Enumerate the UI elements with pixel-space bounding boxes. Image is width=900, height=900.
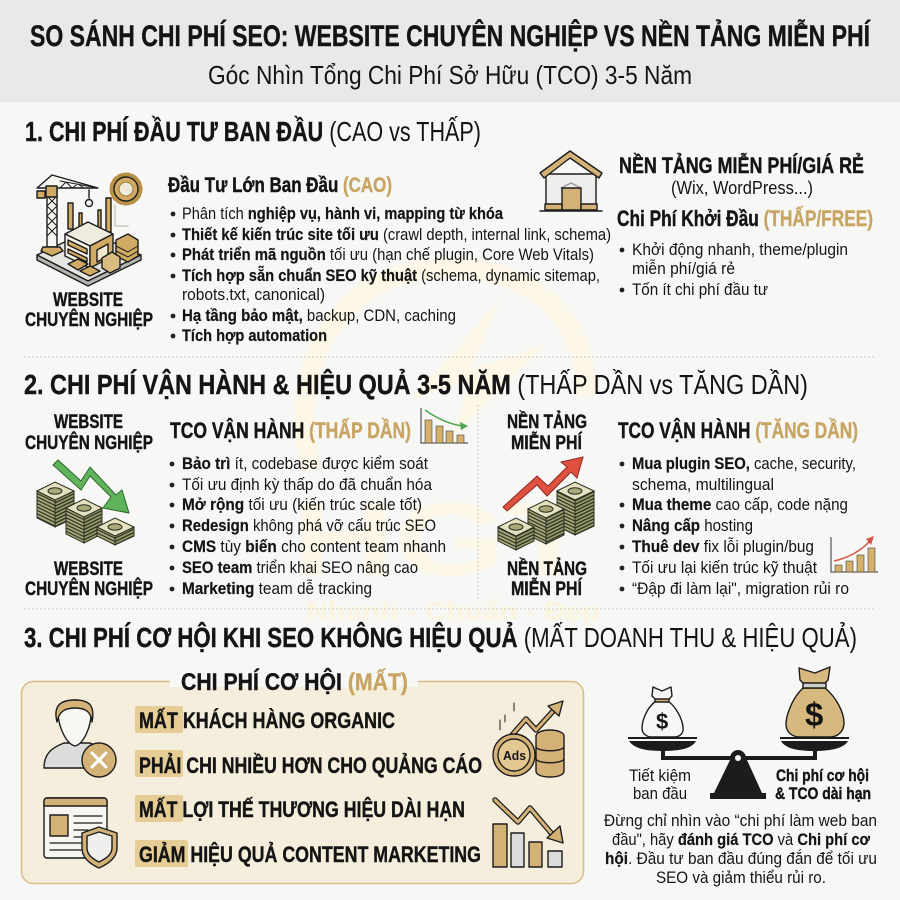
panel: platform running cost: [618, 418, 858, 598]
bullet list: robots.txt, canonical): [182, 285, 325, 304]
row: reduced content marketing: GIẢM HIỆU QUẢ CONTENT MARKETING: [139, 842, 481, 867]
bullet list: [171, 204, 611, 345]
label: nền tảng miễn phí top: [507, 410, 587, 454]
bullet list: Marketing team dễ tracking: [182, 579, 372, 598]
platform examples: (Wix, WordPress...): [671, 178, 813, 198]
heading: Đầu Tư Lớn Ban Đầu (CAO): [168, 174, 392, 197]
label: website chuyên nghiệp: WEBSITE: [53, 289, 123, 311]
label: nền tảng miễn phí top: MIỄN PHÍ: [511, 431, 582, 454]
label: opportunity cost long term: [775, 766, 871, 803]
watermark logo: Nhanh - Chuẩn - Đẹp: [306, 596, 600, 626]
chart: increasing bars: [831, 536, 878, 572]
money bag small: [642, 687, 683, 737]
bullet list: [170, 454, 446, 598]
label: nền tảng miễn phí bottom: NỀN TẢNG: [507, 557, 587, 580]
label: nền tảng miễn phí bottom: [507, 557, 587, 600]
label: website chuyên nghiệp top: [25, 411, 153, 454]
money stack middle: [528, 500, 564, 544]
arrow down: [53, 460, 129, 513]
bullet list: Phân tích nghiệp vụ, hành vi, mapping từ khóa: [182, 204, 503, 223]
bullet list: Redesign không phá vỡ cấu trúc SEO: [182, 516, 436, 535]
bullet list: Mở rộng tối ưu (kiến trúc scale tốt): [182, 495, 422, 514]
conclusion text: đầu", hãy đánh giá TCO và Chi phí cơ: [612, 830, 871, 849]
panel: initial investment professional website: [168, 174, 611, 345]
bullet list: Tối ưu lại kiến trúc kỹ thuật: [632, 558, 817, 577]
bullet list: Mua plugin SEO, cache, security,: [632, 454, 856, 473]
bullet list: [620, 240, 848, 299]
label: website chuyên nghiệp: CHUYÊN NGHIỆP: [25, 307, 153, 331]
label: website chuyên nghiệp top: WEBSITE: [54, 411, 123, 433]
label: nền tảng miễn phí top: NỀN TẢNG: [507, 410, 587, 433]
icon: green falling arrow over money stacks: [37, 460, 134, 545]
bullet list: Tốn ít chi phí đầu tư: [632, 280, 768, 299]
watermark logo: [292, 268, 600, 626]
bullet list: Tối ưu định kỳ thấp do đã chuẩn hóa: [182, 475, 432, 494]
money stack middle: [66, 499, 102, 543]
pivot: [730, 750, 746, 766]
label: initial savings: Tiết kiệm: [629, 766, 691, 785]
money stack short: [498, 518, 534, 550]
watermark logo: HGT: [292, 482, 592, 598]
icon: falling bars: [493, 800, 563, 867]
money stack tall: [557, 482, 594, 535]
bullet list: Mua theme cao cấp, code nặng: [632, 495, 848, 514]
money stack tall: [37, 482, 74, 527]
bullet list: Tích hợp sẵn chuẩn SEO kỹ thuật (schema, dynamic sitemap,: [182, 265, 600, 285]
section 2 heading: 2. CHI PHÍ VẬN HÀNH & HIỆU QUẢ 3-5 NĂM (THẤP DẦN vs TĂNG DẦN): [24, 368, 808, 400]
bullet list: Phát triển mã nguồn tối ưu (hạn chế plugin, Core Web Vitals): [182, 245, 594, 264]
conclusion text: Đừng chỉ nhìn vào “chi phí làm web ban: [604, 811, 877, 830]
heading: TCO VẬN HÀNH (TĂNG DẦN): [618, 418, 858, 443]
label: website chuyên nghiệp top: CHUYÊN NGHIỆP: [25, 430, 153, 454]
money bag large: [786, 667, 844, 737]
label: website chuyên nghiệp bottom: CHUYÊN NGHIỆP: [25, 576, 153, 600]
bullet list: Thiết kế kiến trúc site tối ưu (crawl depth, internal link, schema): [182, 225, 611, 244]
icon: simple house: [540, 151, 602, 211]
bullet list: schema, multilingual: [632, 475, 774, 494]
label: website chuyên nghiệp bottom: [25, 558, 153, 600]
label: initial savings: ban đầu: [633, 784, 687, 803]
bullet list: Bảo trì ít, codebase được kiểm soát: [182, 454, 428, 473]
label: website chuyên nghiệp: [25, 289, 153, 331]
money bag small: $: [656, 709, 668, 734]
bullet list: miễn phí/giá rẻ: [632, 259, 735, 278]
money stack short: [97, 518, 134, 545]
bullet list: Tích hợp automation: [182, 326, 327, 345]
panel: opportunity cost: [22, 668, 584, 884]
heading: cost: Chi Phí Khởi Đầu (THẤP/FREE): [617, 206, 873, 231]
label: initial savings: [629, 766, 691, 803]
icon: red rising arrow over money stacks: [498, 457, 594, 550]
icon: ads coin with rising arrow: Ads: [503, 748, 526, 763]
bullet list: [620, 454, 856, 598]
conclusion text: [604, 811, 877, 887]
conclusion text: hội. Đầu tư ban đầu đúng đắn để tối ưu: [605, 849, 877, 868]
panel: initial cost free platform: [617, 152, 873, 299]
icon: person with cross: [44, 700, 116, 777]
bullet list: SEO team triển khai SEO nâng cao: [182, 558, 418, 577]
row: spend more on ads: PHẢI CHI NHIỀU HƠN CHO QUẢNG CÁO: [139, 753, 482, 778]
subtitle: Góc Nhìn Tổng Chi Phí Sở Hữu (TCO) 3-5 Năm: [208, 60, 692, 90]
panel: professional running cost: [170, 418, 446, 598]
row: lost brand advantage: MẤT LỢI THẾ THƯƠNG HIỆU DÀI HẠN: [139, 797, 465, 822]
red arrow up: [503, 457, 583, 511]
label: website chuyên nghiệp bottom: WEBSITE: [54, 558, 123, 580]
scale beam and stand: [628, 737, 849, 799]
conclusion text: SEO và giảm thiểu rủi ro.: [656, 868, 826, 887]
chart: decreasing bars: [421, 408, 468, 443]
header band: [0, 0, 900, 102]
bullet list: Khởi động nhanh, theme/plugin: [632, 240, 848, 259]
icon: browser with shield: [44, 798, 117, 868]
section 1 heading: 1. CHI PHÍ ĐẦU TƯ BAN ĐẦU (CAO vs THẤP): [25, 116, 481, 147]
label: opportunity cost long term: & TCO dài hạn: [775, 784, 871, 803]
label: opportunity cost long term: Chi phí cơ hội: [776, 766, 869, 785]
icon: ads coin with rising arrow: [493, 701, 564, 777]
illustration: balance scale: [628, 667, 849, 799]
heading: TCO VẬN HÀNH (THẤP DẦN): [170, 418, 411, 443]
bullet list: CMS tùy biến cho content team nhanh: [182, 537, 446, 556]
row: lost organic customers: MẤT KHÁCH HÀNG ORGANIC: [139, 708, 395, 733]
bullet list: “Đập đi làm lại", migration rủi ro: [632, 579, 849, 598]
bullet list: Nâng cấp hosting: [632, 516, 753, 535]
bullet list: Hạ tầng bảo mật, backup, CDN, caching: [182, 306, 456, 325]
money bag large: $: [805, 696, 823, 733]
icon: construction crane and building: [37, 174, 141, 286]
bullet list: Thuê dev fix lỗi plugin/bug: [632, 537, 814, 556]
panel title: CHI PHÍ CƠ HỘI (MẤT): [181, 668, 408, 696]
label: nền tảng miễn phí bottom: MIỄN PHÍ: [511, 577, 582, 600]
